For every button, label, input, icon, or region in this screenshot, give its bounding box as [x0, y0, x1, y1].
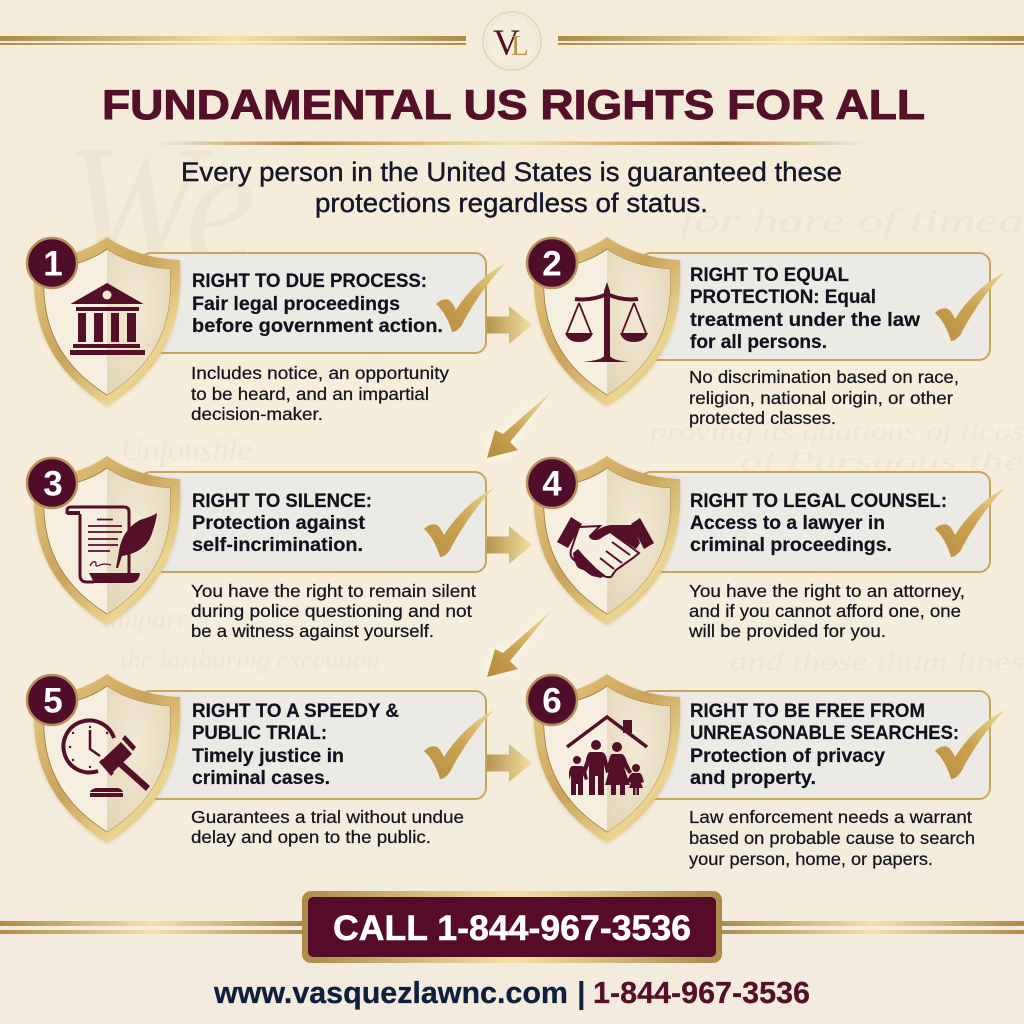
heading text 2: treatment under the law: [690, 310, 920, 331]
badge 1: [27, 238, 77, 288]
badge 4: 4: [542, 464, 562, 504]
badge 2: [527, 238, 577, 288]
description 1: to be heard, and an impartial: [191, 384, 429, 404]
intro text: [181, 157, 842, 218]
heading text 4: [690, 491, 947, 556]
description 6: based on probable cause to search: [689, 828, 975, 848]
background script watermark: the lastburing execution: [120, 645, 380, 674]
badge 4: [527, 458, 577, 508]
background script watermark: [66, 111, 1024, 676]
heading text 4: criminal proceedings.: [690, 535, 892, 556]
panel: right 5 speedy trial: [27, 674, 532, 847]
description 5: delay and open to the public.: [191, 827, 431, 847]
icon: family under roof: [567, 717, 647, 795]
arrow: 3 to 4: [486, 526, 532, 564]
logo: VL monogram: V: [493, 23, 520, 64]
description 4: will be provided for you.: [688, 621, 886, 641]
heading text 6: UNREASONABLE SEARCHES:: [690, 723, 959, 744]
panel: right 1 due process: [27, 237, 532, 424]
description 4: [688, 581, 965, 641]
description 2: religion, national origin, or other: [689, 388, 953, 408]
description 4: and if you cannot afford one, one: [689, 601, 961, 621]
heading text 3: RIGHT TO SILENCE:: [192, 491, 372, 512]
description 6: [689, 807, 975, 869]
icon: courthouse: [70, 283, 145, 355]
check 2: [935, 272, 1005, 341]
shield 6: [534, 674, 680, 843]
badge 1: 1: [43, 244, 63, 284]
panel: right 4 legal counsel: [527, 456, 1005, 641]
heading text 1: [192, 271, 443, 337]
heading box 3: [140, 472, 486, 572]
description 3: during police questioning and not: [191, 601, 472, 621]
background script watermark: of Pursuous the: [740, 447, 1024, 476]
call to action button: [302, 891, 722, 963]
heading text 5: PUBLIC TRIAL:: [192, 723, 327, 744]
background script watermark: Unfoushle: [120, 431, 252, 467]
bottom gold rule: left: [0, 921, 304, 934]
description 6: your person, home, or papers.: [689, 849, 933, 869]
shield 5: [34, 674, 180, 843]
shield 4: [534, 456, 680, 625]
shield 1: [34, 237, 180, 406]
badge 6: [527, 675, 577, 725]
heading text 1: before government action.: [192, 316, 443, 337]
badge 3: [27, 458, 77, 508]
background script watermark: proving its quations of ticos: [647, 417, 1024, 446]
check 5: [424, 710, 494, 779]
heading text 6: and property.: [690, 768, 816, 789]
shield 3: [34, 456, 180, 625]
heading text 2: for all persons.: [690, 332, 827, 353]
description 3: be a witness against yourself.: [191, 621, 434, 641]
intro text: Every person in the United States is guaranteed these: [181, 157, 842, 187]
heading text 5: RIGHT TO A SPEEDY &: [192, 701, 399, 722]
panel: right 6 unreasonable searches: [527, 674, 1005, 869]
footer contact line: [213, 975, 810, 1010]
bottom gold rule: right: [720, 921, 1024, 934]
arrow: 1 to 2: [486, 306, 532, 344]
heading box 2: [640, 253, 990, 360]
check 1: [436, 263, 506, 332]
heading text 3: [192, 491, 372, 556]
background script watermark: impart: [110, 604, 186, 635]
top gold rule: left: [0, 36, 466, 45]
icon: handshake: [557, 517, 654, 578]
heading text 2: RIGHT TO EQUAL: [690, 265, 849, 286]
title underline: [155, 142, 865, 145]
description 1: decision-maker.: [191, 404, 323, 424]
heading text 4: RIGHT TO LEGAL COUNSEL:: [690, 491, 947, 512]
heading text 5: [192, 701, 399, 789]
heading box 1: [140, 253, 486, 353]
footer contact line: |: [577, 975, 586, 1010]
background script watermark: and those thum lines: [730, 647, 1024, 676]
description 4: You have the right to an attorney,: [689, 581, 965, 601]
intro text: protections regardless of status.: [315, 188, 708, 218]
description 1: [191, 363, 449, 424]
description 6: Law enforcement needs a warrant: [689, 807, 972, 827]
description 3: [191, 581, 476, 641]
call to action button: CALL 1-844-967-3536: [333, 909, 691, 948]
background script watermark: We: [66, 111, 256, 299]
heading text 6: [690, 701, 959, 789]
arrow: 5 to 6: [486, 744, 532, 782]
check 3: [424, 488, 494, 557]
shield 2: [534, 237, 680, 406]
logo: VL monogram: [483, 12, 541, 70]
background script watermark: for hare of timea: [680, 203, 1024, 240]
icon: scales of justice: [565, 282, 648, 362]
check 6: [935, 710, 1005, 779]
badge 3: 3: [43, 464, 63, 504]
description 2: protected classes.: [689, 408, 836, 428]
heading text 3: Protection against: [192, 513, 366, 534]
heading text 1: RIGHT TO DUE PROCESS:: [192, 271, 427, 292]
description 5: [191, 807, 464, 847]
description 2: [689, 367, 959, 428]
heading box 6: [640, 691, 990, 799]
description 2: No discrimination based on race,: [689, 367, 959, 387]
title: FUNDAMENTAL US RIGHTS FOR ALL: [102, 81, 925, 128]
arrow: 4 to 5: [487, 609, 553, 677]
description 5: Guarantees a trial without undue: [191, 807, 464, 827]
panel: right 2 equal protection: [527, 237, 1005, 428]
heading text 6: RIGHT TO BE FREE FROM: [690, 701, 925, 722]
footer contact line: 1-844-967-3536: [593, 975, 810, 1010]
heading text 5: Timely justice in: [192, 746, 344, 767]
logo: VL monogram: L: [511, 30, 529, 62]
heading text 2: [690, 265, 920, 353]
heading box 5: [140, 691, 486, 799]
heading text 2: PROTECTION: Equal: [690, 287, 876, 308]
panel: right 3 silence: [27, 456, 532, 641]
heading text 6: Protection of privacy: [690, 746, 885, 767]
heading text 1: Fair legal proceedings: [192, 294, 400, 315]
icon: scroll and quill: [67, 507, 157, 583]
footer contact line: www.vasquezlawnc.com: [213, 975, 568, 1010]
heading text 3: self-incrimination.: [192, 535, 363, 556]
description 1: Includes notice, an opportunity: [191, 363, 449, 383]
check 4: [935, 488, 1005, 557]
badge 5: [27, 675, 77, 725]
icon: clock and gavel: [63, 720, 150, 797]
top gold rule: right: [558, 36, 1024, 45]
description 3: You have the right to remain silent: [191, 581, 476, 601]
heading text 5: criminal cases.: [192, 768, 330, 789]
badge 6: 6: [542, 682, 562, 720]
arrow: 2 to 3: [487, 390, 553, 458]
badge 2: 2: [542, 244, 562, 284]
badge 5: 5: [43, 682, 63, 720]
heading text 4: Access to a lawyer in: [690, 513, 885, 534]
heading box 4: [640, 472, 990, 572]
